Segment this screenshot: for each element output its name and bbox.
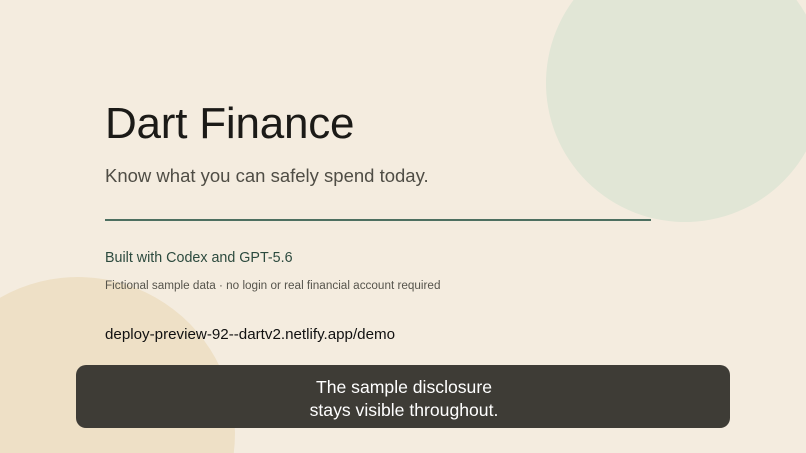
caption text: stays visible throughout. — [310, 400, 498, 420]
title: Dart Finance — [105, 99, 354, 148]
caption text: The sample disclosure — [316, 377, 492, 397]
decorative circle: tan bottom left — [0, 277, 235, 453]
divider rule — [105, 219, 651, 221]
caption text — [310, 377, 498, 420]
sample data note: Fictional sample data · no login or real financial account required — [105, 279, 440, 292]
decorative circle: green top right — [546, 0, 806, 222]
subtitle: Know what you can safely spend today. — [105, 165, 429, 186]
demo url: deploy-preview-92--dartv2.netlify.app/demo — [105, 326, 395, 343]
credit line: Built with Codex and GPT-5.6 — [105, 250, 293, 266]
caption bar — [76, 365, 730, 428]
